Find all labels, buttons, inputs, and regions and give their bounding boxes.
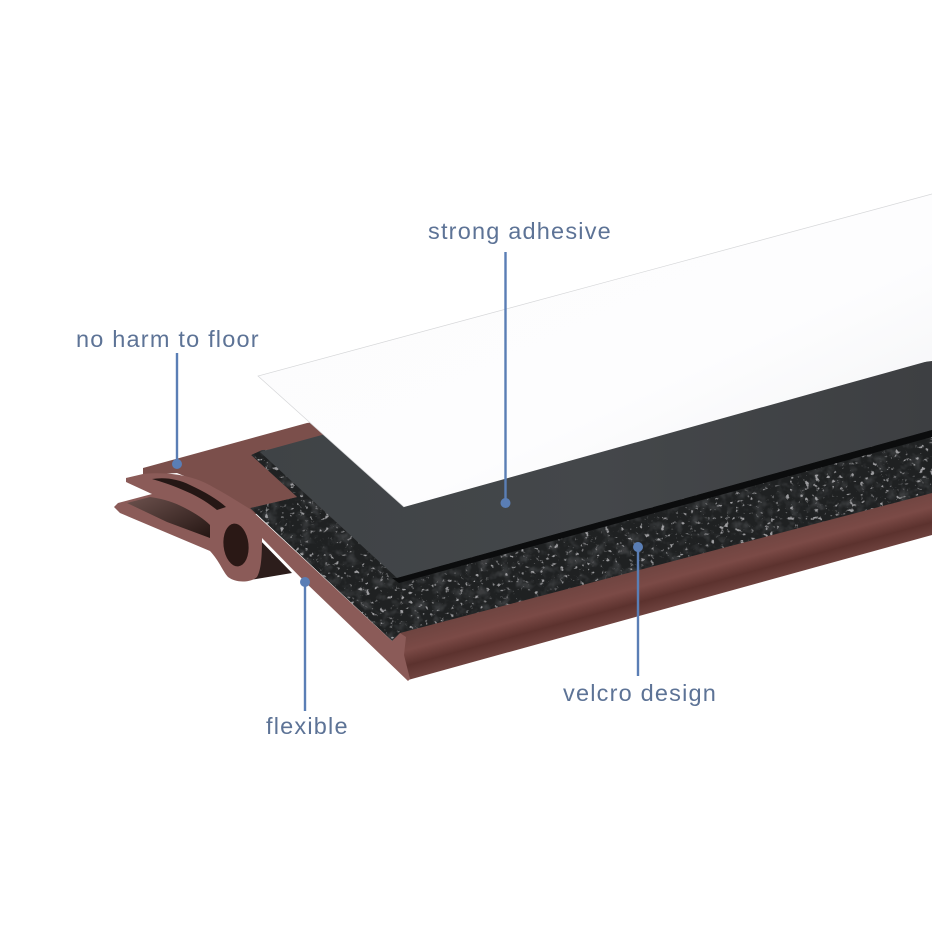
tube hole xyxy=(221,522,251,568)
rail body xyxy=(400,493,932,680)
label: flexible xyxy=(266,577,349,739)
profile front face xyxy=(114,473,410,681)
label: strong adhesive xyxy=(428,218,612,508)
label: no harm to floor: no harm to floor xyxy=(76,326,260,352)
lower flange cavity xyxy=(127,497,210,538)
white release film xyxy=(258,194,932,507)
label: velcro design: velcro design xyxy=(563,680,717,706)
upper flange slot xyxy=(152,478,226,510)
sheet shadow edge xyxy=(392,430,932,583)
black adhesive backing sheet xyxy=(260,361,932,578)
film edge xyxy=(258,194,932,507)
velcro layer xyxy=(245,425,932,645)
label: velcro design xyxy=(563,542,717,706)
brown strip top surface xyxy=(143,420,335,516)
shadow below tube xyxy=(250,535,292,580)
infographic: door seal strip cross-section xyxy=(78,194,932,734)
label: flexible: flexible xyxy=(266,713,349,739)
label: no harm to floor xyxy=(76,326,260,469)
label: strong adhesive: strong adhesive xyxy=(428,218,612,244)
